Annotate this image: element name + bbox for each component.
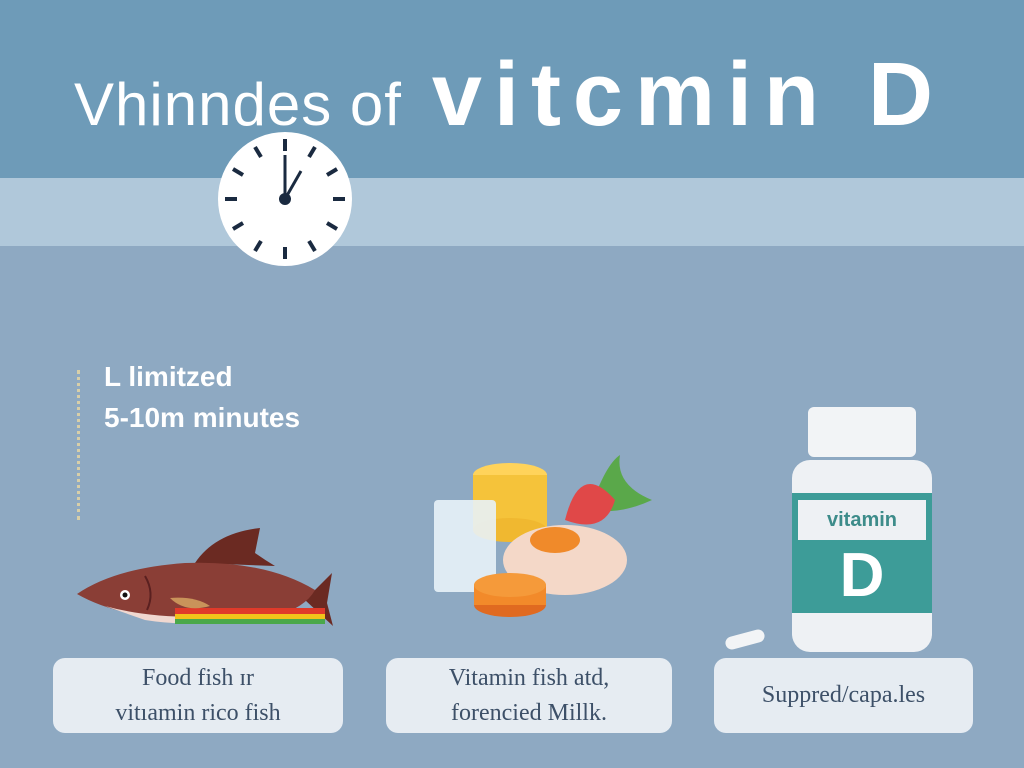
- caption box: supplements: [714, 658, 973, 733]
- icon: fish: [77, 528, 333, 626]
- text: limited sun: 5-10m minutes: [104, 402, 300, 433]
- caption box: fish: Food fish ɪr: [142, 665, 254, 691]
- icon: vitamin D bottle: vitamin: [827, 509, 897, 531]
- icon: clock: [218, 132, 352, 266]
- caption box: milk: forencied Millk.: [451, 700, 607, 726]
- icon: vitamin D bottle: D: [840, 541, 884, 610]
- caption box: fish: vitıamin rico fish: [115, 700, 281, 726]
- title: [74, 45, 945, 145]
- title: Vhinndes of: [74, 71, 402, 138]
- light band: [0, 178, 1024, 246]
- caption box: supplements: Suppred/capa.les: [762, 682, 925, 708]
- header band: [0, 0, 1024, 178]
- text: limited sun: L limitzed: [104, 361, 233, 392]
- icon: dairy and foods: [434, 455, 652, 617]
- title: vitcmin D: [432, 45, 945, 145]
- caption box: milk: [386, 658, 672, 733]
- caption box: fish: [53, 658, 343, 733]
- dotted line: [77, 370, 81, 520]
- icon: vitamin D bottle: [726, 407, 932, 652]
- text: limited sun: [104, 361, 300, 433]
- caption box: milk: Vitamin fish atd,: [449, 665, 609, 691]
